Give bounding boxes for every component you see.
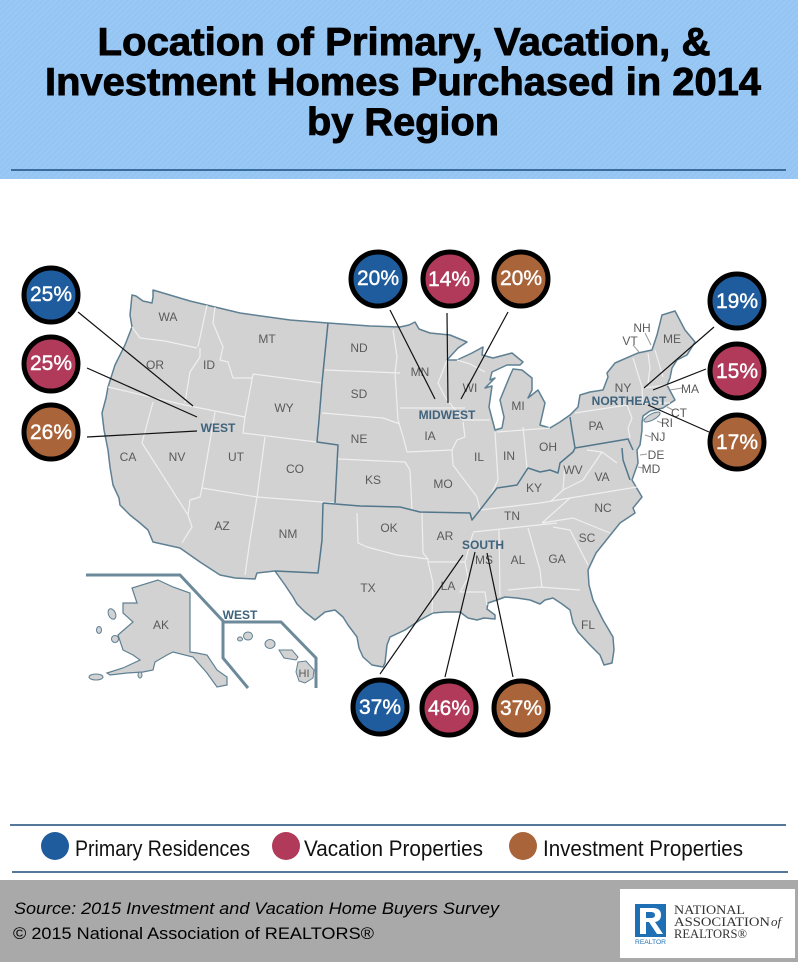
map: state labels: IL [474, 450, 484, 464]
logo: National Association of Realtors: REALTOR [635, 939, 666, 946]
map: state labels: IN [503, 449, 515, 463]
map: state labels: OK [380, 521, 398, 535]
map: state labels: AK [153, 618, 169, 632]
legend: Primary Residences [75, 836, 250, 861]
map: state labels: UT [228, 450, 245, 464]
map: region labels: MIDWEST [419, 408, 476, 422]
map: state labels: CA [120, 450, 136, 464]
logo: National Association of Realtors: NATIONAL [674, 903, 745, 917]
map: state labels: NJ [651, 430, 665, 444]
map: state labels: WY [274, 401, 294, 415]
bubbles: Northeast: 19% [716, 290, 758, 313]
map: Alaska and Hawaii insets [86, 575, 316, 688]
title: Investment Homes Purchased in 2014 [45, 61, 761, 104]
title: Location of Primary, Vacation, & [98, 21, 710, 64]
icon: Hawaii [238, 632, 314, 683]
bubbles: Midwest: 20% [500, 267, 542, 290]
map: region labels [201, 394, 667, 622]
bubbles: Northeast [710, 274, 764, 469]
bubbles: South [353, 680, 548, 735]
map: state labels: MT [258, 332, 276, 346]
map: state labels: HI [298, 668, 310, 680]
map: state borders [108, 305, 670, 613]
copyright text: © 2015 National Association of REALTORS® [13, 924, 374, 943]
map: state labels: VA [594, 470, 610, 484]
map: state labels: IA [424, 429, 436, 443]
title: by Region [307, 101, 499, 144]
source text: Source: 2015 Investment and Vacation Home Buyers Survey [14, 899, 501, 918]
map: region labels: WEST [201, 421, 236, 435]
map: state labels [120, 310, 699, 680]
map: state labels: TX [360, 581, 376, 595]
map: state labels: RI [661, 416, 673, 430]
map: state labels: ND [350, 341, 368, 355]
logo: National Association of Realtors: REALTORS® [674, 927, 747, 941]
bubbles: Midwest: 20% [357, 267, 399, 290]
map: state labels: MI [511, 399, 525, 413]
map: state labels: KS [365, 473, 381, 487]
bubbles: Midwest: 14% [428, 268, 470, 291]
map: region borders [275, 323, 633, 573]
map: state labels: AL [511, 553, 526, 567]
bubbles: South: 46% [428, 697, 470, 720]
map: state labels: AZ [214, 519, 230, 533]
legend [10, 825, 788, 872]
map: state labels: WA [159, 310, 177, 324]
map: state labels: NM [279, 527, 297, 541]
map: state labels: VT [622, 334, 638, 348]
bubbles: West: 25% [30, 283, 72, 306]
map: state labels: MO [433, 477, 453, 491]
logo: National Association of Realtors: of [771, 914, 784, 929]
panel: title banner [0, 0, 798, 179]
icon: Alaska [107, 580, 227, 687]
bubbles: West [24, 268, 78, 459]
map: state labels: DE [648, 448, 664, 462]
bubbles: Midwest [351, 252, 548, 306]
map: state labels: CO [286, 462, 304, 476]
map: state labels: PA [588, 419, 604, 433]
map: state labels: GA [548, 552, 566, 566]
map: state labels: SD [351, 387, 368, 401]
map: state labels: SC [579, 531, 596, 545]
bubbles: West: 25% [30, 352, 72, 375]
logo: National Association of Realtors: ASSOCIATION [674, 915, 770, 929]
logo: National Association of Realtors [620, 889, 795, 958]
map: contiguous states [102, 290, 695, 667]
map: state labels: OH [539, 440, 557, 454]
bubbles: South: 37% [359, 696, 401, 719]
map: state labels: NV [169, 450, 185, 464]
bubbles: South: 37% [500, 697, 542, 720]
legend: Investment Properties [543, 836, 743, 861]
map: Long Island [643, 410, 661, 424]
map: region labels: NORTHEAST [592, 394, 667, 408]
map: state labels: NC [594, 501, 612, 515]
footer [0, 880, 798, 962]
map: state labels: FL [581, 618, 595, 632]
map: state labels: AR [437, 529, 454, 543]
map: region labels: SOUTH [462, 538, 504, 552]
map: state labels: MA [681, 382, 699, 396]
map: state labels: ID [203, 358, 215, 372]
map: state labels: OR [146, 358, 164, 372]
map: state labels: NY [615, 381, 631, 395]
title [45, 21, 761, 144]
map: state labels: KY [526, 481, 542, 495]
map: state labels: WI [463, 381, 477, 395]
map: region labels: WEST [223, 608, 258, 622]
bubbles: Northeast: 17% [716, 431, 758, 454]
legend: Vacation Properties [304, 836, 483, 861]
map: state labels: NH [633, 321, 651, 335]
leader lines [78, 310, 714, 677]
bubbles: Northeast: 15% [716, 360, 758, 383]
map: state labels: CT [671, 406, 688, 420]
map: United States regions [86, 290, 699, 688]
map: small-state pointers [633, 333, 682, 468]
map: state labels: MS [475, 553, 493, 567]
map: state labels: ME [663, 332, 681, 346]
map: state labels: MN [411, 365, 429, 379]
map: state labels: WV [563, 463, 583, 477]
bubbles: West: 26% [30, 421, 72, 444]
map: state labels: LA [441, 579, 455, 593]
map: state labels: MD [642, 462, 661, 476]
map: state labels: TN [504, 509, 520, 523]
map: state labels: NE [351, 432, 367, 446]
icon: Alaskan islands [89, 608, 142, 680]
